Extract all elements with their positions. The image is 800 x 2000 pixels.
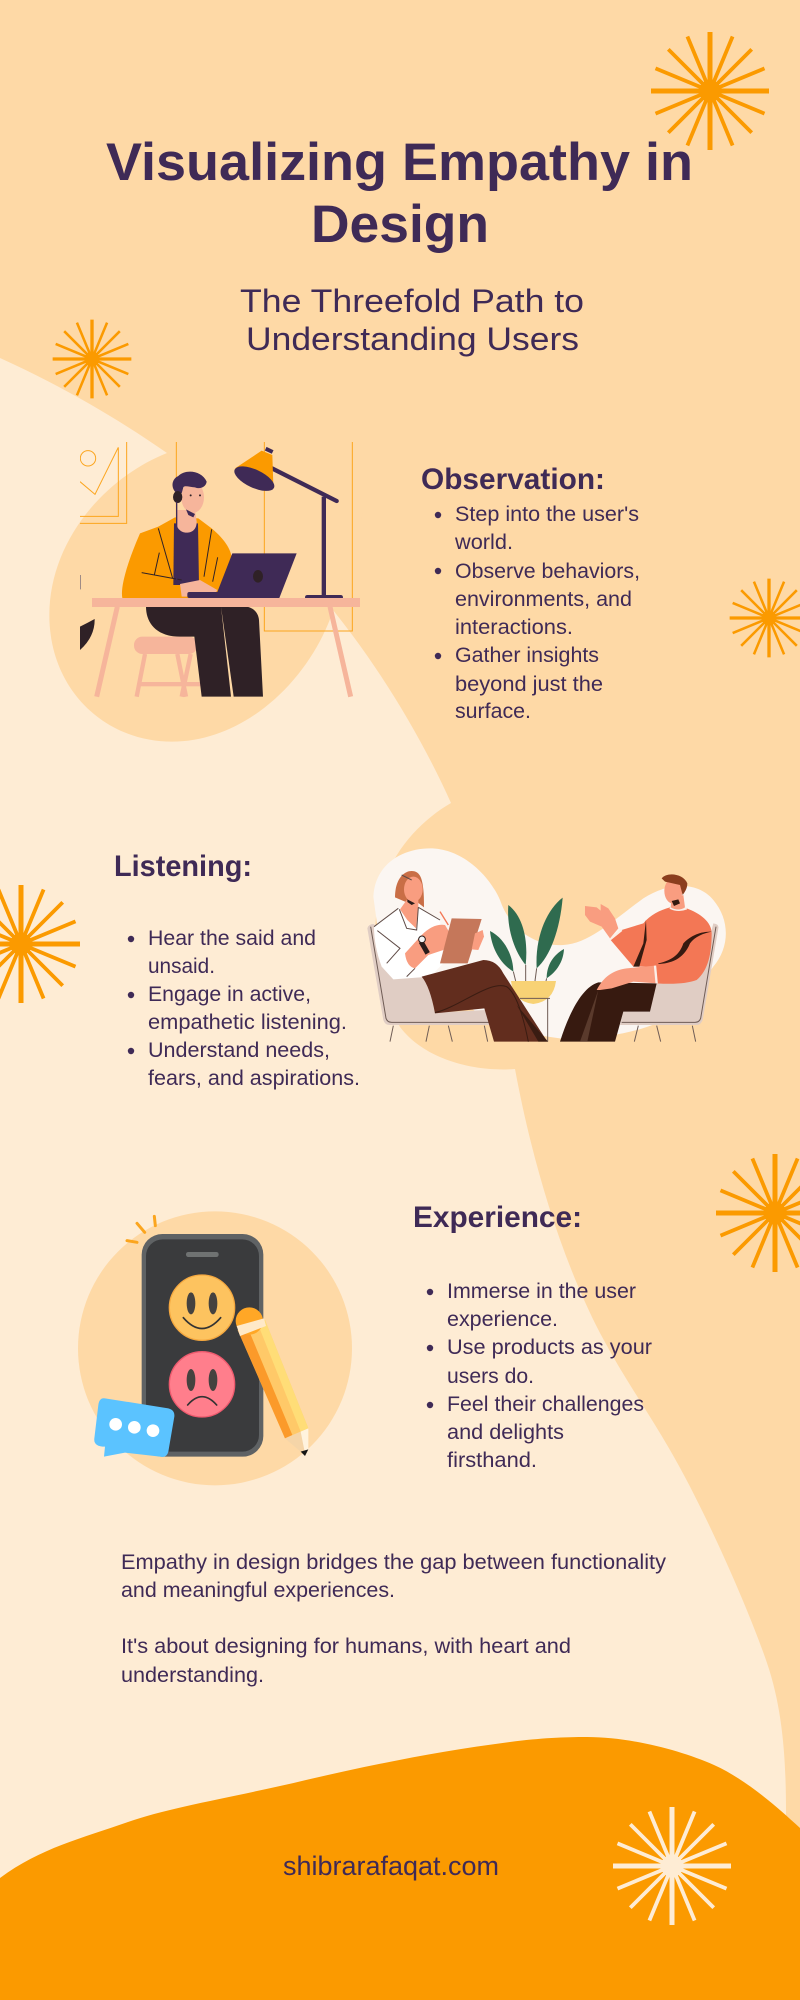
list: Observation: beyond just the: [455, 672, 603, 696]
subtitle: [240, 283, 584, 357]
list: Listening: empathetic listening.: [148, 1010, 347, 1034]
list: Experience: Use products as your: [447, 1335, 652, 1359]
closing text: [121, 1550, 666, 1687]
man in orange sweater: [560, 874, 712, 1042]
list: Observation: interactions.: [455, 615, 573, 639]
desk legs: [97, 607, 351, 697]
illustration: two people talking with plant: [367, 848, 726, 1042]
phone: [142, 1234, 263, 1457]
closing text: understanding.: [121, 1663, 264, 1687]
sparks: [127, 1216, 155, 1242]
sad face: [169, 1352, 235, 1417]
list: Listening: [128, 926, 360, 1090]
list: Experience: [427, 1279, 652, 1472]
starburst: right small: [730, 579, 800, 657]
subtitle: The Threefold Path to: [240, 283, 584, 319]
title: Design: [311, 195, 489, 254]
background: orange footer wave: [0, 1737, 800, 2000]
list: Listening: Engage in active,: [148, 982, 311, 1006]
list: Observation: Observe behaviors,: [455, 559, 640, 583]
right chair: [620, 923, 718, 1042]
heading: Listening: Listening:: [114, 850, 252, 883]
list: Experience: Immerse in the user: [447, 1279, 636, 1303]
starburst: right: [716, 1154, 800, 1272]
white blob: [373, 848, 726, 1039]
list: Experience: Feel their challenges: [447, 1392, 644, 1416]
illustration: phone with emoji faces and pencil: [78, 1211, 352, 1485]
title: [106, 133, 693, 254]
closing text: It's about designing for humans, with heart and: [121, 1634, 571, 1658]
list: Experience: firsthand.: [447, 1448, 537, 1472]
heading: Observation: Observation:: [421, 463, 605, 496]
website: shibrarafaqat.com: [283, 1851, 499, 1881]
man: jacket: [122, 510, 232, 598]
list: Listening: Hear the said and: [148, 926, 316, 950]
stool: [134, 637, 202, 697]
starburst: top right: [651, 32, 769, 150]
happy face: [169, 1275, 235, 1340]
lamp: [231, 449, 343, 600]
title: Visualizing Empathy in: [106, 133, 693, 192]
left chair: [367, 924, 492, 1042]
chat bubble: [94, 1398, 174, 1457]
starburst: top left small: [53, 320, 131, 398]
wall frames: [80, 442, 352, 650]
closing text: and meaningful experiences.: [121, 1578, 395, 1602]
list: Observation: Gather insights: [455, 643, 599, 667]
blob behind desk scene: [49, 453, 367, 742]
list: Observation: Step into the user's: [455, 502, 639, 526]
peach circle: [78, 1211, 352, 1485]
man: trousers: [146, 607, 263, 697]
list: Listening: fears, and aspirations.: [148, 1066, 360, 1090]
starburst: footer: [613, 1807, 731, 1925]
list: Observation: surface.: [455, 699, 531, 723]
man: head: [173, 472, 207, 582]
desk top: [92, 598, 360, 607]
list: Listening: unsaid.: [148, 954, 215, 978]
list: Observation: environments, and: [455, 587, 632, 611]
pencil: [236, 1307, 308, 1456]
list: Experience: users do.: [447, 1364, 534, 1388]
closing text: Empathy in design bridges the gap between functionality: [121, 1550, 666, 1574]
list: Experience: experience.: [447, 1307, 558, 1331]
list: Listening: Understand needs,: [148, 1038, 330, 1062]
list: Experience: and delights: [447, 1420, 564, 1444]
woman: [374, 871, 548, 1042]
subtitle: Understanding Users: [246, 321, 579, 357]
starburst: left: [0, 885, 80, 1003]
list: Observation: world.: [454, 530, 513, 554]
plant: [490, 898, 564, 1042]
laptop: [187, 553, 297, 598]
illustration: person at desk with laptop and lamp: [49, 442, 367, 742]
list: Observation: [435, 502, 640, 723]
heading: Experience: Experience:: [413, 1201, 582, 1234]
